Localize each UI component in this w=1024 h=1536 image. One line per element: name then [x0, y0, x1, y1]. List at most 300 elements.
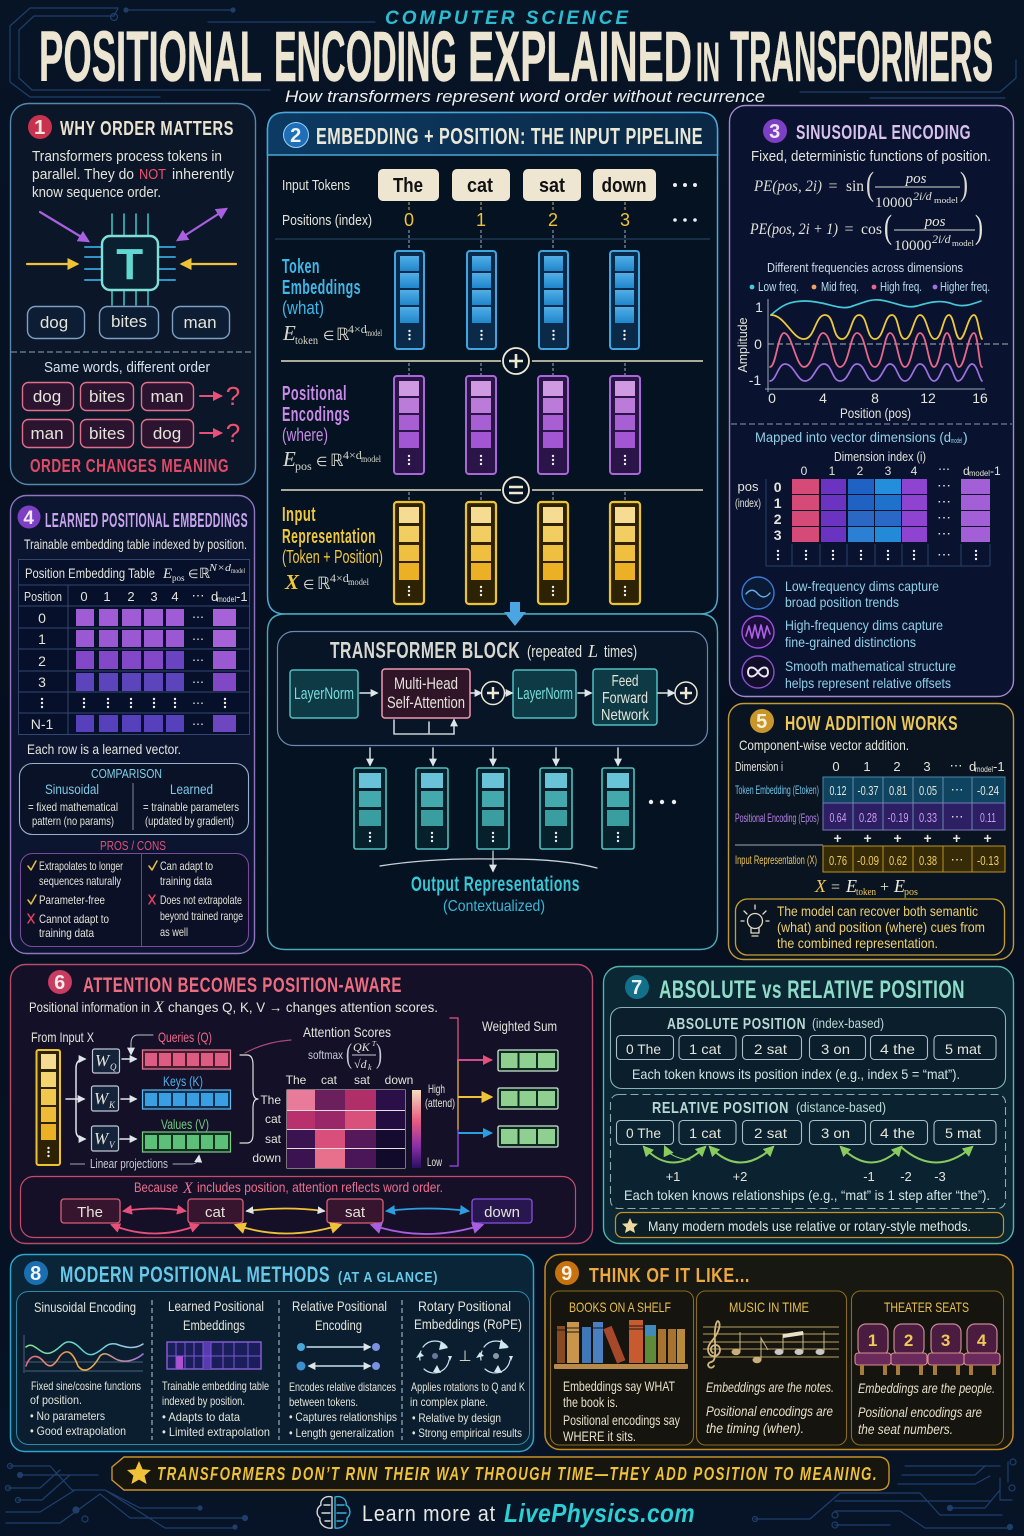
high frequency text: fine-grained distinctions — [785, 634, 916, 650]
pros cons box: Cannot adapt to — [39, 912, 109, 926]
heatmap: vector dimensions: ⋯ — [937, 525, 951, 541]
embedding table: ∈ — [188, 567, 198, 581]
column: relative positional encoding: • Length generalization — [289, 1426, 394, 1440]
embedding table: 3 — [38, 674, 46, 690]
addition table: -0.13 — [977, 853, 999, 868]
position-aware attention callout: X — [182, 1180, 194, 1197]
position-aware attention callout: Because — [134, 1179, 178, 1195]
formula cos: PE(pos, 2i + 1) — [749, 221, 838, 238]
layernorm box — [290, 670, 358, 718]
embedding table: ℝ — [199, 567, 210, 582]
addition formula: = — [831, 879, 840, 896]
comparison box: = fixed mathematical — [28, 800, 118, 814]
comparison box: = trainable parameters — [143, 800, 239, 814]
badge 8 and heading: (AT A GLANCE) — [338, 1269, 438, 1286]
layernorm box 2: LayerNorm — [517, 684, 573, 703]
feed forward network box — [593, 669, 657, 725]
smooth structure text — [785, 658, 956, 691]
note: many modern models — [616, 1212, 1004, 1238]
pros cons box: training data — [39, 926, 94, 940]
panel 8: modern positional methods — [10, 1254, 534, 1452]
addition table: 0.33 — [919, 810, 937, 825]
embedding table: model — [217, 595, 236, 604]
embedding table: ⋯ — [192, 588, 204, 603]
formula cos: = — [844, 221, 854, 238]
badge 9 and heading: 9 — [561, 1263, 573, 1285]
pros cons box: Extrapolates to longer — [39, 859, 123, 873]
column: relative positional encoding: Encoding — [315, 1317, 362, 1333]
embedding table: Position Embedding Table — [25, 565, 155, 581]
layernorm box 2 — [513, 670, 576, 718]
token embeddings label: Embeddings — [282, 277, 361, 299]
icon: seats: 4 — [977, 1331, 987, 1350]
addition formula: X — [814, 876, 827, 896]
column: sinusoidal encoding: • Good extrapolation — [30, 1424, 126, 1438]
intro text: Transformers process tokens in — [32, 148, 222, 165]
attention heatmap: down — [252, 1151, 281, 1165]
formula E token: 4×d — [348, 322, 367, 336]
column: rotary positional embeddings: • Relative by design — [412, 1411, 501, 1425]
icon: books — [554, 1320, 688, 1369]
merge brace — [380, 851, 597, 871]
badge 7 and heading: 7 — [631, 977, 643, 999]
attention scores heading and formula: Attention Scores — [303, 1024, 391, 1040]
addition table: -1 — [993, 759, 1005, 774]
description: Trainable embedding table indexed by position. — [24, 536, 247, 552]
transformer block title: L — [587, 641, 598, 661]
attention heatmap — [252, 1073, 413, 1168]
attention scores heading and formula: QK — [353, 1040, 371, 1054]
formula sin: sin — [846, 178, 864, 195]
pros cons box: training data — [160, 874, 212, 888]
relative position box: -2 — [900, 1169, 912, 1184]
card: music in time: Positional encodings are — [706, 1403, 833, 1419]
icon: infinity — [742, 656, 774, 688]
column: relative positional encoding: Relative Positional — [292, 1298, 387, 1314]
description: Fixed, deterministic functions of position. — [751, 148, 991, 165]
token chips: The — [393, 175, 423, 197]
column: rotary positional embeddings: ⊥ — [458, 1349, 472, 1365]
panel 4: learned positional embeddings — [10, 496, 254, 954]
subtitle: How transformers represent word order without recurrence — [285, 87, 765, 106]
icon: seats — [855, 1324, 1000, 1375]
formula E pos: E — [282, 447, 296, 471]
formula cos: 10000 — [894, 238, 932, 254]
addition table: 3 — [923, 759, 931, 774]
formula E pos: model — [361, 454, 381, 464]
relative position box: -3 — [934, 1169, 946, 1184]
heatmap: vector dimensions: Dimension index (i) — [834, 449, 926, 464]
badge 5 and heading: HOW ADDITION WORKS — [785, 713, 958, 735]
column: rotary positional embeddings: Rotary Positional — [418, 1298, 511, 1314]
pink word rows: man — [150, 387, 184, 406]
formula E token — [282, 321, 382, 347]
header — [39, 8, 993, 106]
addition table: Input Representation (X) — [735, 853, 817, 867]
heatmap: vector dimensions: 3 — [774, 527, 782, 543]
heatmap: vector dimensions: (index) — [735, 496, 761, 510]
icon: seats: 1 — [868, 1331, 878, 1350]
heatmap: vector dimensions: 1 — [774, 495, 782, 511]
addition table: + — [924, 830, 932, 846]
embedding table: ⋯ — [192, 717, 204, 731]
heatmap: vector dimensions: 2 — [774, 511, 782, 527]
callout: insight: (what) and position (where) cues from — [777, 919, 985, 935]
formula X: ∈ — [303, 577, 314, 592]
formula E token: ∈ — [323, 328, 334, 343]
addition table: ⋯ — [950, 809, 964, 824]
relative position box: 3 on — [821, 1125, 850, 1141]
pink word rows: dog — [153, 424, 181, 443]
comparison box: Sinusoidal — [45, 781, 99, 797]
word boxes — [28, 306, 230, 338]
formula cos: cos — [861, 221, 882, 238]
addition table: + — [953, 830, 961, 846]
panel 6: attention becomes position-aware — [10, 964, 592, 1244]
embedding table: ⋯ — [192, 696, 204, 710]
pink word rows — [22, 381, 240, 448]
pros cons box: Does not extrapolate — [160, 893, 242, 907]
formula sin: PE(pos, 2i) — [753, 178, 822, 195]
badge 4 and heading: 4 — [23, 508, 35, 529]
panel 2: input pipeline — [268, 112, 718, 614]
smooth structure text: Smooth mathematical structure — [785, 658, 956, 674]
from input x vector: From Input X — [31, 1029, 95, 1045]
addition table: + — [834, 830, 842, 846]
attention heatmap: cat — [265, 1112, 282, 1126]
formula sin: model — [934, 196, 959, 205]
attention scores heading and formula: ( — [346, 1039, 352, 1070]
relative position box: Each token knows relationships (e.g., “mat” is 1 step after “the”). — [624, 1187, 990, 1203]
intro text: inherently — [172, 166, 234, 183]
positional encoding vectors — [394, 376, 640, 474]
weight matrices: W — [94, 1129, 110, 1148]
pros cons box: sequences naturally — [39, 874, 121, 888]
heatmap: vector dimensions: 4 — [911, 464, 918, 478]
input representation label: (Token + Position) — [282, 547, 383, 567]
position-aware attention callout: includes position, attention reflects word order. — [197, 1179, 443, 1195]
badge 5 and heading — [750, 709, 958, 735]
heatmap: vector dimensions: 0 — [774, 479, 782, 495]
icon: music staff — [703, 1321, 839, 1368]
column: relative positional encoding: • Captures relationships — [289, 1410, 397, 1424]
position-aware attention callout: cat — [205, 1204, 226, 1221]
intro text: know sequence order. — [32, 184, 161, 201]
colour scale: Low — [427, 1155, 442, 1169]
formula cos: ) — [975, 209, 983, 246]
column: learned positional embeddings: Embeddings — [183, 1317, 245, 1333]
chart legend: Higher freq. — [940, 279, 990, 294]
embedding table: 0 — [38, 610, 46, 626]
badge 3 and heading: 3 — [769, 121, 781, 143]
from input x vector — [31, 1029, 95, 1165]
panel 9: think of it like — [545, 1254, 1013, 1450]
addition table: -0.37 — [858, 783, 878, 798]
caption same words: Same words, different order — [44, 359, 210, 376]
comparison box — [20, 764, 248, 834]
positional encodings label: Positional — [282, 383, 347, 405]
eyebrow: COMPUTER SCIENCE — [385, 8, 629, 29]
formula cos: pos — [924, 214, 946, 230]
pink word rows: man — [30, 424, 64, 443]
description: changes Q, K, V → changes attention scores. — [168, 999, 438, 1015]
order changes meaning: ORDER CHANGES MEANING — [30, 456, 229, 476]
colour scale: (attend) — [425, 1096, 455, 1110]
formula sin: 10000 — [875, 195, 912, 211]
table caption: Each row is a learned vector. — [27, 741, 181, 757]
weighted sum — [482, 1018, 558, 1147]
token embeddings label: Token — [282, 256, 320, 278]
badge 6 and heading: 6 — [54, 972, 66, 994]
pipeline header band — [268, 112, 718, 155]
card: theater seats: the seat numbers. — [858, 1421, 953, 1437]
row labels tokens and positions: Positions (index) — [282, 212, 372, 229]
row labels tokens and positions: Input Tokens — [282, 177, 350, 194]
attention scores heading and formula: softmax — [308, 1048, 343, 1062]
heatmap: vector dimensions: ⋯ — [938, 462, 950, 476]
addition table: 0.28 — [859, 810, 877, 825]
addition table: 0.81 — [889, 783, 907, 798]
heatmap: vector dimensions — [735, 449, 1001, 566]
absolute position box: 2 sat — [754, 1041, 787, 1057]
weight matrices: K — [108, 1100, 116, 1110]
position-aware attention callout — [20, 1176, 576, 1238]
card: music in time: the timing (when). — [706, 1420, 804, 1436]
formula sin: = — [828, 178, 838, 195]
token chips: down — [602, 175, 646, 197]
addition table: 0 — [832, 759, 840, 774]
formula sin: 2i/d — [913, 189, 933, 203]
relative position box: (distance-based) — [796, 1099, 886, 1115]
badge 8 and heading: 8 — [30, 1263, 42, 1285]
multi-head self-attention box: Multi-Head — [394, 674, 458, 693]
relative position box — [610, 1094, 1006, 1208]
positional encodings label: (where) — [282, 425, 328, 445]
addition table: 0.76 — [829, 853, 847, 868]
input representation label — [282, 504, 383, 567]
note: many modern models: Many modern models use relative or rotary-style methods. — [648, 1218, 971, 1234]
token chips: sat — [539, 175, 565, 197]
embedding table: 1 — [38, 631, 46, 647]
badge 1: 1 — [34, 117, 46, 139]
embedding table: ⋯ — [192, 610, 204, 624]
footer: LivePhysics.com — [504, 1498, 695, 1528]
positional encodings label — [282, 383, 350, 445]
heatmap: vector dimensions: ⋯ — [937, 493, 951, 509]
output arrows — [370, 748, 618, 765]
embedding table — [18, 560, 250, 735]
attention scores heading and formula: ) — [376, 1039, 382, 1070]
addition table: 0.12 — [830, 783, 846, 798]
weight matrices: V — [109, 1140, 116, 1150]
pros cons box: Parameter-free — [39, 893, 105, 907]
attention heatmap: sat — [354, 1073, 371, 1087]
column: relative positional encoding — [289, 1298, 397, 1440]
badge 9 and heading — [555, 1261, 750, 1287]
badge 4 and heading — [18, 506, 248, 532]
column: rotary positional embeddings: Applies rotations to Q and K — [411, 1380, 525, 1394]
feed forward network box: Feed — [612, 673, 638, 690]
values vector — [142, 1116, 230, 1152]
column: sinusoidal encoding: of position. — [30, 1393, 82, 1407]
absolute position box: 5 mat — [945, 1041, 981, 1057]
feed forward network box: Network — [601, 707, 650, 724]
absolute position box — [610, 1008, 1006, 1088]
line chart: sinusoids: Amplitude — [735, 318, 750, 372]
relative position box: 4 the — [880, 1125, 915, 1141]
addition table: ⋯ — [950, 758, 962, 773]
card: music in time: Embeddings are the notes. — [706, 1379, 834, 1395]
line chart: sinusoids — [735, 299, 1010, 421]
absolute position box: ABSOLUTE POSITION — [667, 1016, 806, 1033]
card: books on a shelf: Embeddings say WHAT — [563, 1378, 675, 1394]
card: books on a shelf: Positional encodings say — [563, 1412, 680, 1428]
addition table: -0.09 — [857, 853, 879, 868]
addition table: 1 — [863, 759, 871, 774]
formula X: model — [348, 577, 369, 587]
panel 1: why order matters — [10, 104, 256, 484]
transformer block title: TRANSFORMER BLOCK — [330, 637, 520, 663]
chart legend: Mid freq. — [821, 279, 859, 294]
position indices — [404, 210, 630, 230]
attention heatmap: cat — [321, 1073, 338, 1087]
column: learned positional embeddings: indexed by position. — [162, 1394, 245, 1408]
formula cos: 2i/d — [932, 232, 952, 246]
line chart: sinusoids: 1 — [755, 299, 763, 315]
embedding table: Position — [24, 589, 62, 604]
callout: insight: The model can recover both semantic — [777, 903, 978, 919]
pipeline header band: EMBEDDING + POSITION: THE INPUT PIPELINE — [316, 123, 703, 149]
column: sinusoidal encoding: Fixed sine/cosine functions — [31, 1379, 141, 1393]
line chart: sinusoids: 12 — [920, 390, 936, 406]
keys vector — [142, 1073, 230, 1109]
weight matrices — [92, 1049, 120, 1151]
title: ENCODING — [274, 18, 457, 97]
low frequency text — [785, 578, 939, 610]
addition table: d — [969, 759, 976, 774]
pros cons box — [20, 854, 248, 946]
formula E pos: 4×d — [343, 448, 362, 462]
absolute position box: 4 the — [880, 1041, 915, 1057]
embedding table: pos — [172, 573, 185, 583]
output representations: Output Representations — [411, 873, 580, 896]
badge 3 and heading — [763, 119, 971, 144]
formula sin — [753, 166, 968, 211]
plus operator — [281, 348, 703, 374]
multi-head self-attention box: Self-Attention — [387, 693, 465, 712]
card: books on a shelf: WHERE it sits. — [563, 1428, 636, 1444]
relative position box: 0 The — [626, 1125, 661, 1141]
comparison box: COMPARISON — [91, 766, 162, 781]
formula X: ℝ — [317, 574, 331, 593]
transformer block title: times) — [604, 642, 637, 661]
formula E token: ℝ — [336, 325, 350, 344]
addition formula — [814, 876, 918, 898]
heatmap: vector dimensions: 1 — [829, 464, 836, 478]
high frequency text — [785, 617, 943, 650]
position-aware attention callout: down — [484, 1204, 520, 1221]
pink word rows: bites — [89, 424, 125, 443]
embedding table: 1 — [103, 589, 111, 604]
addition table: 0.11 — [980, 810, 996, 825]
banner: takeaway — [112, 1457, 889, 1490]
column: learned positional embeddings: • Limited extrapolation — [162, 1425, 270, 1439]
intro text: NOT — [139, 166, 166, 183]
formula E token: model — [366, 328, 382, 338]
chart caption: Different frequencies across dimensions — [767, 260, 963, 275]
feed forward network box: Forward — [602, 690, 648, 707]
title — [39, 18, 993, 97]
icon: transformer chip with arrows — [27, 209, 236, 305]
pipeline header band: 2 — [290, 125, 302, 147]
icon: low frequency wave — [742, 577, 774, 609]
addition table: model — [975, 765, 993, 774]
keys vector: Keys (K) — [163, 1073, 203, 1089]
intro text — [32, 148, 234, 201]
chart legend — [750, 279, 990, 294]
position-aware attention callout: The — [77, 1204, 103, 1221]
word boxes: dog — [40, 313, 68, 332]
word boxes: bites — [111, 312, 147, 331]
card: music in time: MUSIC IN TIME — [729, 1299, 809, 1315]
column: learned positional embeddings: Learned Positional — [168, 1298, 264, 1314]
embedding table: N-1 — [31, 716, 53, 732]
badge 8 and heading: MODERN POSITIONAL METHODS — [60, 1262, 330, 1287]
projection branch arrows — [66, 1035, 153, 1139]
badge 9 and heading: THINK OF IT LIKE... — [589, 1265, 750, 1287]
pink word rows: dog — [33, 387, 61, 406]
pros cons box: as well — [160, 925, 188, 939]
token embedding vectors — [395, 251, 639, 349]
heatmap: vector dimensions: 2 — [857, 464, 864, 478]
addition table: 0.62 — [889, 853, 907, 868]
relative position box: 2 sat — [754, 1125, 787, 1141]
addition formula: E — [893, 876, 905, 896]
badge 6 and heading: ATTENTION BECOMES POSITION-AWARE — [83, 974, 402, 997]
heatmap: vector dimensions: ⋯ — [937, 509, 951, 525]
add operator 2 — [675, 682, 697, 704]
formula cos: model — [952, 239, 975, 248]
addition table — [735, 758, 1005, 872]
smooth structure text: helps represent relative offsets — [785, 675, 951, 691]
addition formula: pos — [904, 887, 918, 898]
badge 5 and heading: 5 — [756, 711, 768, 733]
card: theater seats: THEATER SEATS — [884, 1299, 969, 1315]
relative position box: 5 mat — [945, 1125, 981, 1141]
output bracket and arrows — [450, 1018, 491, 1166]
description — [29, 999, 438, 1016]
transformer block container — [278, 632, 708, 746]
description: X — [153, 999, 165, 1016]
comparison box: (updated by gradient) — [145, 814, 234, 828]
addition table: 0.64 — [830, 810, 846, 825]
pros cons box: beyond trained range — [160, 909, 243, 923]
pros cons heading: PROS / CONS — [100, 838, 166, 853]
formula sin: ( — [866, 166, 874, 203]
position indices: 2 — [548, 210, 558, 230]
pink word rows: ? — [226, 418, 240, 448]
icon: seats: 3 — [941, 1331, 951, 1350]
badge 1 — [28, 115, 52, 139]
card: theater seats — [852, 1291, 1004, 1445]
embedding table: 4 — [171, 589, 179, 604]
addition table: Token Embedding (Etoken) — [735, 783, 819, 797]
join bracket — [240, 1040, 291, 1143]
formula cos — [749, 209, 983, 254]
embedding table: ⋯ — [192, 675, 204, 689]
high frequency text: High-frequency dims capture — [785, 617, 943, 633]
addition formula: E — [845, 876, 857, 896]
